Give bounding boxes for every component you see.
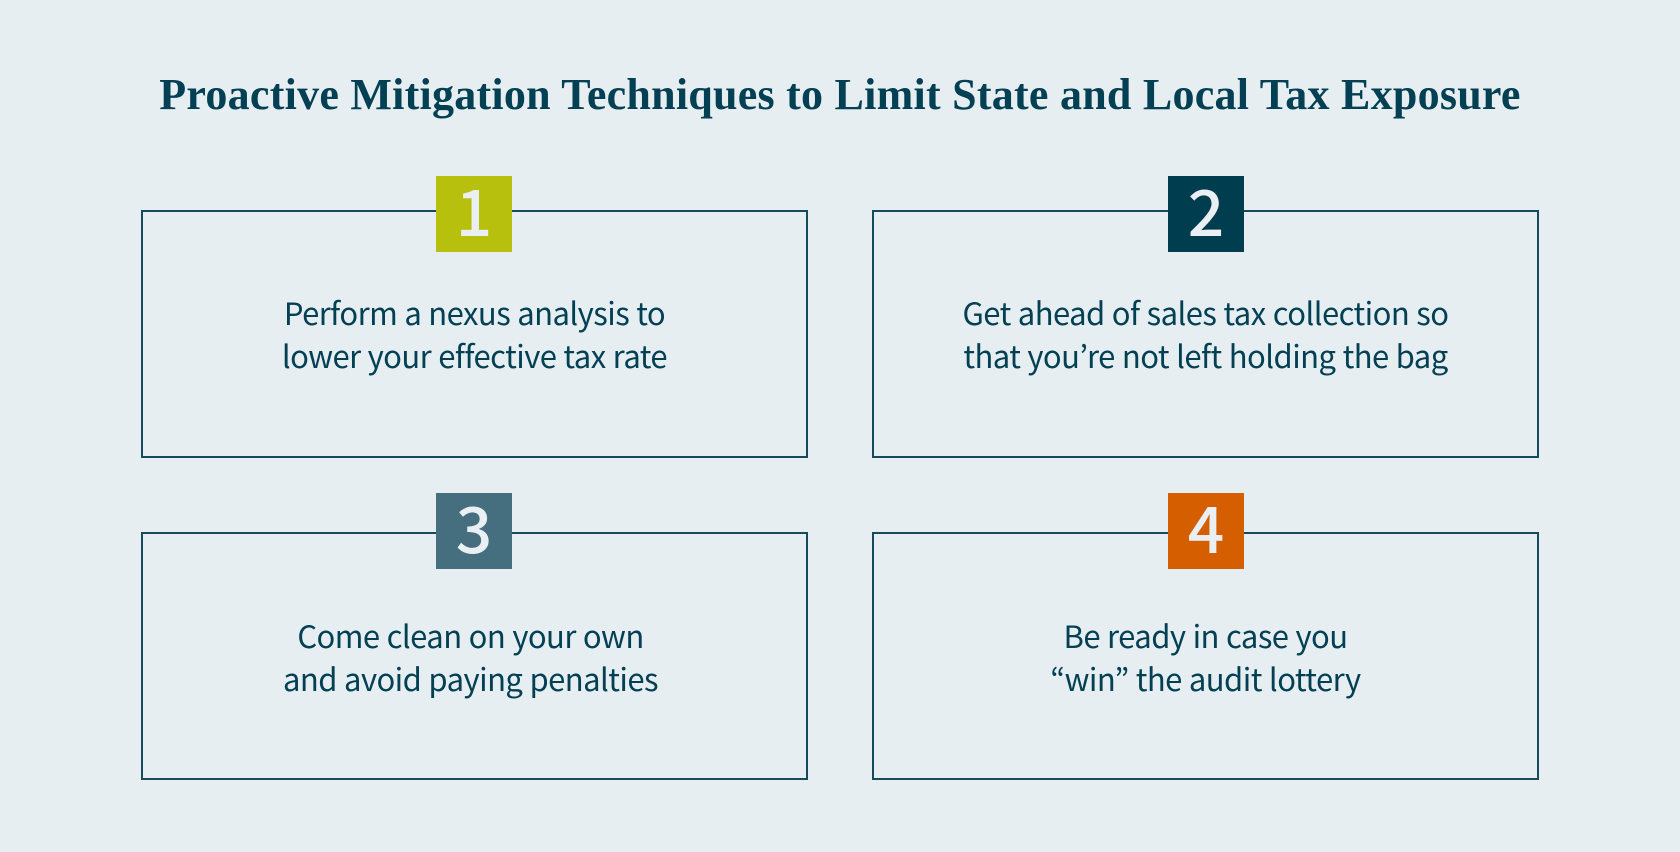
badge: number 1: 1 (456, 163, 492, 255)
panel: step 3 (141, 532, 808, 780)
badge: number 3 (436, 493, 512, 569)
text: step 4: Be ready in case you (1064, 612, 1347, 657)
panel: step 2 (872, 210, 1539, 458)
text: step 4 (1050, 612, 1361, 700)
text: step 1: Perform a nexus analysis to (284, 289, 665, 334)
title: Proactive Mitigation Techniques to Limit State and Local Tax Exposure (159, 70, 1521, 119)
panel: step 4 (872, 532, 1539, 780)
badge: number 2: 2 (1188, 163, 1224, 255)
text: step 1 (282, 289, 667, 377)
text: step 3 (283, 612, 658, 700)
text: step 2 (962, 289, 1448, 377)
badge: number 4: 4 (1188, 480, 1224, 572)
text: step 2: Get ahead of sales tax collection so (962, 289, 1448, 334)
badge: number 1 (436, 176, 512, 252)
badge: number 3: 3 (456, 480, 492, 572)
badge: number 4 (1168, 493, 1244, 569)
text: step 4: “win” the audit lottery (1050, 655, 1361, 700)
text: step 3: Come clean on your own (297, 612, 644, 657)
text: step 1: lower your effective tax rate (282, 332, 667, 377)
text: step 3: and avoid paying penalties (283, 655, 658, 700)
panel: step 1 (141, 210, 808, 458)
badge: number 2 (1168, 176, 1244, 252)
text: step 2: that you’re not left holding the bag (963, 332, 1448, 377)
